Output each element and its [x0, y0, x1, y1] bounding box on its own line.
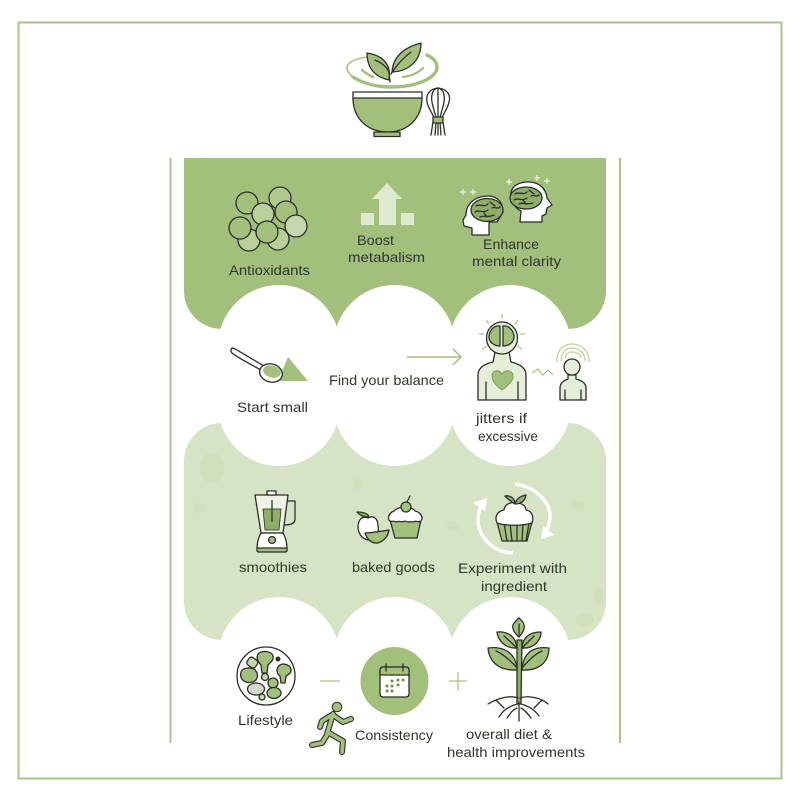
brain: [489, 326, 500, 346]
icon: two brains in heads: [460, 175, 552, 235]
right inner rule: [619, 158, 621, 743]
label: overall diet & health improvements: [447, 726, 585, 760]
icon: up arrow with squares: [361, 183, 414, 225]
label: Boost metabalism: [348, 232, 425, 265]
label: Boost metabalism: metabalism: [348, 249, 425, 265]
swirl: [347, 55, 437, 87]
label: Start small: Start small: [237, 399, 308, 415]
white scallop circles: [184, 285, 606, 740]
label: Experiment with ingredient: ingredient: [481, 578, 547, 594]
label: Experiment with ingredient: Experiment with: [458, 560, 567, 576]
label: Enhance mental clarity: mental clarity: [472, 253, 561, 269]
label: Antioxidants: Antioxidants: [229, 262, 310, 278]
label: jitters if excessive: [475, 410, 538, 444]
icon: zigzag wave: [532, 369, 553, 375]
cycle arrows: [478, 484, 550, 553]
left inner rule: [170, 158, 172, 743]
whisk: [427, 88, 450, 135]
label: Enhance mental clarity: Enhance: [483, 236, 539, 252]
cupcake: [497, 522, 532, 541]
label: jitters if excessive: excessive: [478, 428, 538, 444]
label: baked goods: baked goods: [352, 559, 435, 575]
sparkles: [460, 175, 550, 195]
icon: minus sign: [320, 680, 340, 682]
icon: running figure: [312, 702, 351, 752]
icon: plant with roots: [488, 618, 549, 721]
label: Boost metabalism: Boost: [357, 232, 394, 248]
icon: fruit and cupcake: [357, 496, 422, 543]
icon: small person with waves: [557, 344, 589, 400]
body: [478, 352, 526, 400]
label: Find your balance: Find your balance: [329, 372, 444, 388]
icon: plate of vegetables: [237, 647, 295, 705]
icon: antioxidant circles: [229, 187, 307, 251]
rays: [479, 314, 525, 349]
icon: plus sign: [449, 672, 467, 690]
icon: blender: [255, 491, 295, 552]
label: overall diet & health improvements: health improvements: [447, 744, 585, 760]
icon: person with jitters: [478, 314, 526, 400]
panel: mixing ideas (light green band): [184, 423, 606, 640]
arrow: to jitters figure: [407, 349, 461, 365]
label: Enhance mental clarity: [472, 236, 561, 269]
label: jitters if excessive: jitters if: [475, 410, 527, 426]
label: Lifestyle: Lifestyle: [238, 712, 293, 728]
label: Consistency: Consistency: [355, 727, 433, 743]
head left: [463, 196, 503, 235]
icon: calendar in green circle: [360, 647, 428, 715]
label: smoothies: smoothies: [239, 559, 307, 575]
label: Experiment with ingredient: [458, 560, 567, 594]
icon: spoon with powder: [231, 348, 308, 385]
label: overall diet & health improvements: overall diet &: [466, 726, 553, 742]
leaves: [367, 53, 389, 80]
icon: matcha bowl with leaves and whisk: [347, 43, 450, 136]
panel: benefits (dark green band): [184, 158, 606, 329]
head right: [511, 182, 552, 222]
icon: cupcake with cycle arrows: [473, 484, 555, 553]
heart: [492, 371, 513, 390]
bowl: [353, 92, 422, 99]
